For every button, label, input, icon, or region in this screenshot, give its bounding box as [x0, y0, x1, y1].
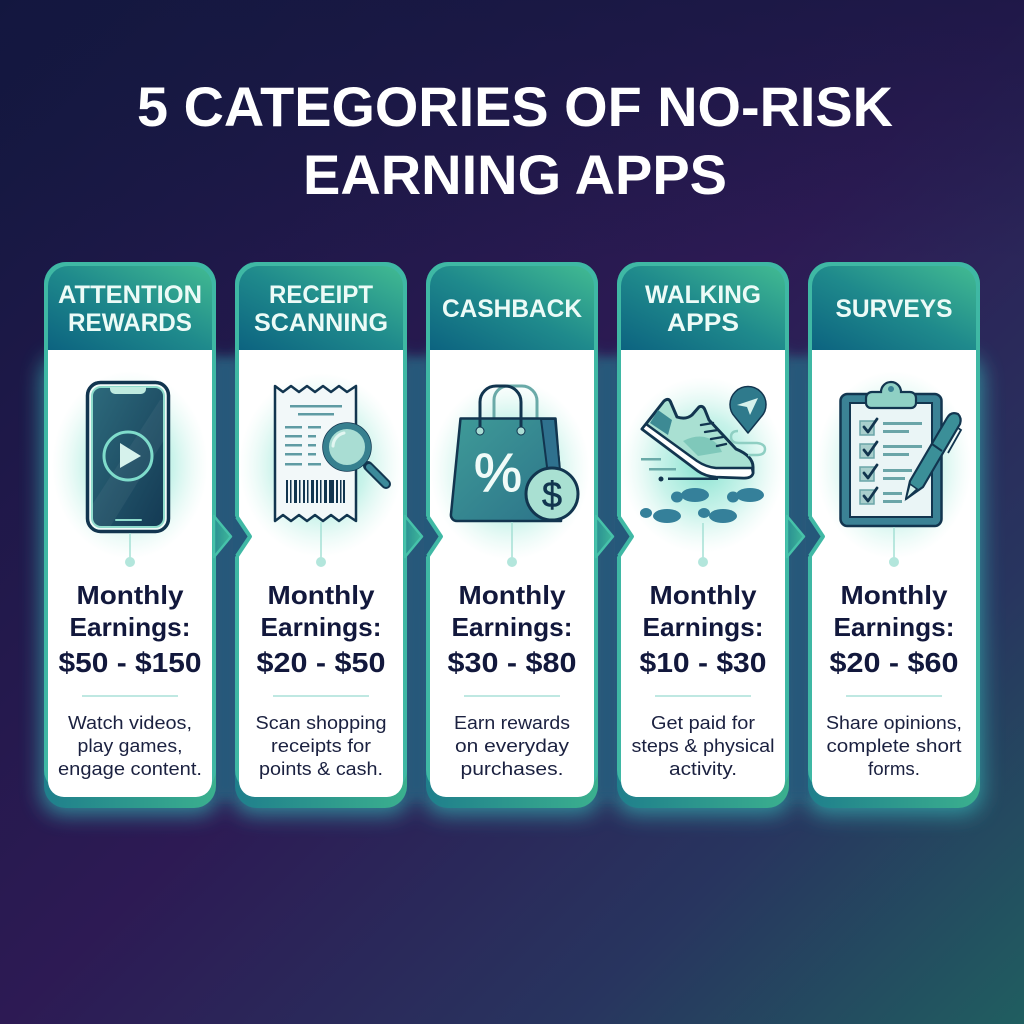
- icon: clipboard and pen: [840, 382, 961, 526]
- heading: walking apps: [645, 281, 761, 337]
- description: Get paid for: [651, 713, 755, 733]
- earnings: $20 - $50: [256, 647, 386, 678]
- description: activity.: [669, 759, 737, 779]
- title: 5 CATEGORIES OF NO-RISK: [137, 75, 893, 138]
- earnings: Monthly: [268, 580, 375, 610]
- earnings: [256, 580, 386, 678]
- panel: cashback: [424, 262, 598, 808]
- earnings: Earnings:: [260, 612, 382, 642]
- arrow 4: [787, 516, 804, 557]
- icon glow: [816, 371, 972, 559]
- description: receipts for: [271, 736, 371, 756]
- heading: attention rewards: [58, 281, 202, 337]
- icon: shopping bag with coin: $: [542, 474, 562, 515]
- notch: [615, 516, 632, 557]
- heading: receipt scanning: [254, 281, 388, 337]
- notch: [806, 516, 823, 557]
- heading: walking apps: WALKING: [645, 281, 761, 309]
- description: Earn rewards: [454, 713, 570, 733]
- connector: [889, 527, 899, 567]
- description: on everyday: [455, 736, 569, 756]
- heading: walking apps: APPS: [667, 309, 739, 337]
- description: [826, 713, 962, 779]
- description: [454, 713, 570, 779]
- heading: attention rewards: ATTENTION: [58, 281, 202, 309]
- icon: receipt and magnifier: [275, 386, 386, 521]
- earnings: [58, 580, 202, 678]
- icon: shopping bag with coin: [451, 386, 578, 521]
- earnings: $10 - $30: [640, 647, 766, 678]
- card glow: [42, 356, 982, 814]
- earnings: [830, 580, 958, 678]
- description: forms.: [868, 759, 920, 779]
- panel: walking apps: [615, 262, 789, 808]
- earnings: Monthly: [650, 580, 757, 610]
- title: EARNING APPS: [303, 143, 727, 206]
- notch: [233, 516, 250, 557]
- earnings: $20 - $60: [830, 647, 958, 678]
- description: [632, 713, 774, 779]
- title: [137, 75, 893, 206]
- description: engage content.: [58, 759, 202, 779]
- description: steps & physical: [632, 736, 774, 756]
- description: Watch videos,: [68, 713, 192, 733]
- description: points & cash.: [259, 759, 383, 779]
- earnings: [448, 580, 576, 678]
- description: Scan shopping: [256, 713, 386, 733]
- description: play games,: [78, 736, 182, 756]
- icon: shopping bag with coin: %: [474, 443, 522, 503]
- icon glow: [621, 377, 785, 553]
- earnings: Earnings:: [70, 612, 190, 642]
- panel: attention rewards: [44, 262, 216, 808]
- icon glow: [239, 373, 403, 557]
- panel: surveys: [806, 262, 980, 808]
- earnings: Earnings:: [834, 612, 954, 642]
- notch: [424, 516, 441, 557]
- description: [256, 713, 386, 779]
- heading: receipt scanning: RECEIPT: [269, 281, 373, 309]
- earnings: Earnings:: [642, 612, 764, 642]
- description: Share opinions,: [826, 713, 962, 733]
- description: [58, 713, 202, 779]
- earnings: Monthly: [458, 580, 566, 610]
- earnings: Monthly: [76, 580, 184, 610]
- earnings: $30 - $80: [448, 647, 576, 678]
- arrow 2: [405, 516, 422, 557]
- earnings: $50 - $150: [58, 647, 202, 678]
- icon glow: [430, 380, 590, 560]
- description: complete short: [826, 736, 962, 756]
- icon: running shoe, pin and footprints: [640, 387, 766, 523]
- icon glow: [52, 371, 208, 559]
- arrow 1: [214, 516, 231, 557]
- connector: [125, 533, 135, 567]
- earnings: Monthly: [840, 580, 948, 610]
- earnings: [640, 580, 766, 678]
- heading: attention rewards: REWARDS: [68, 309, 192, 337]
- connector: [316, 522, 326, 567]
- heading: cashback: CASHBACK: [442, 295, 582, 323]
- heading: receipt scanning: SCANNING: [254, 309, 388, 337]
- description: purchases.: [460, 759, 564, 779]
- icon: phone with play button: [88, 382, 168, 532]
- heading: surveys: SURVEYS: [836, 295, 952, 323]
- connector: [698, 523, 708, 567]
- earnings: Earnings:: [452, 612, 572, 642]
- arrow 3: [596, 516, 613, 557]
- connector: [507, 522, 517, 567]
- panel: receipt scanning: [233, 262, 407, 808]
